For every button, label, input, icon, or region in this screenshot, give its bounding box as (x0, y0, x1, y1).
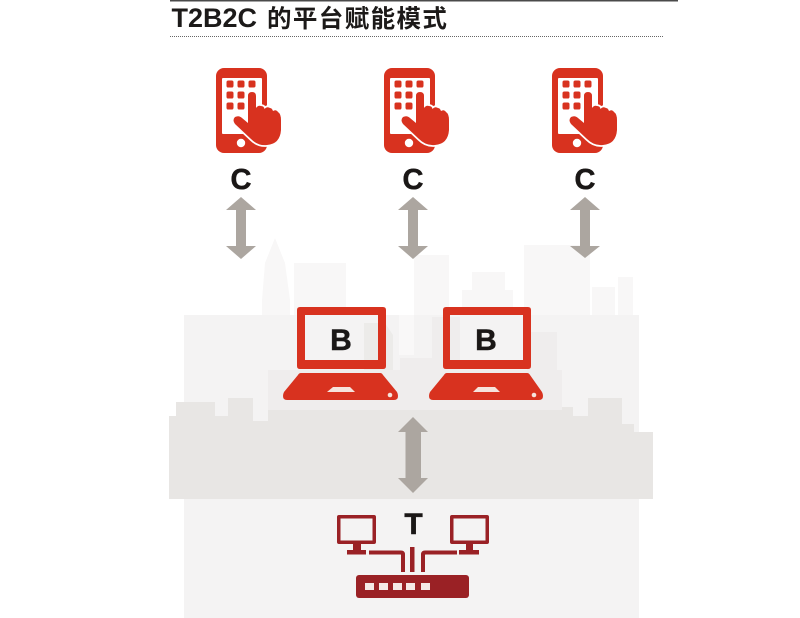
label C right: C (575, 164, 596, 196)
title rule (170, 0, 678, 2)
label B right: B (475, 324, 497, 357)
icon: phone C right (552, 68, 617, 153)
arrow left (226, 197, 256, 259)
label C left: C (231, 164, 252, 196)
icon: network (337, 515, 489, 598)
title: 的平台赋能模式 (267, 0, 448, 35)
label C middle: C (403, 164, 424, 196)
label B left: B (330, 324, 352, 357)
icon: laptop B right (429, 307, 543, 400)
label T: T (404, 508, 423, 541)
icon: phone C left (216, 68, 281, 153)
icon: laptop B left (283, 307, 398, 400)
icon: phone C middle (384, 68, 449, 153)
arrow bottom (398, 417, 428, 493)
arrow right (570, 197, 600, 258)
city skyline background (169, 238, 653, 618)
title: T2B2C (172, 3, 257, 33)
dotted divider (170, 36, 664, 38)
arrow middle (398, 197, 428, 259)
